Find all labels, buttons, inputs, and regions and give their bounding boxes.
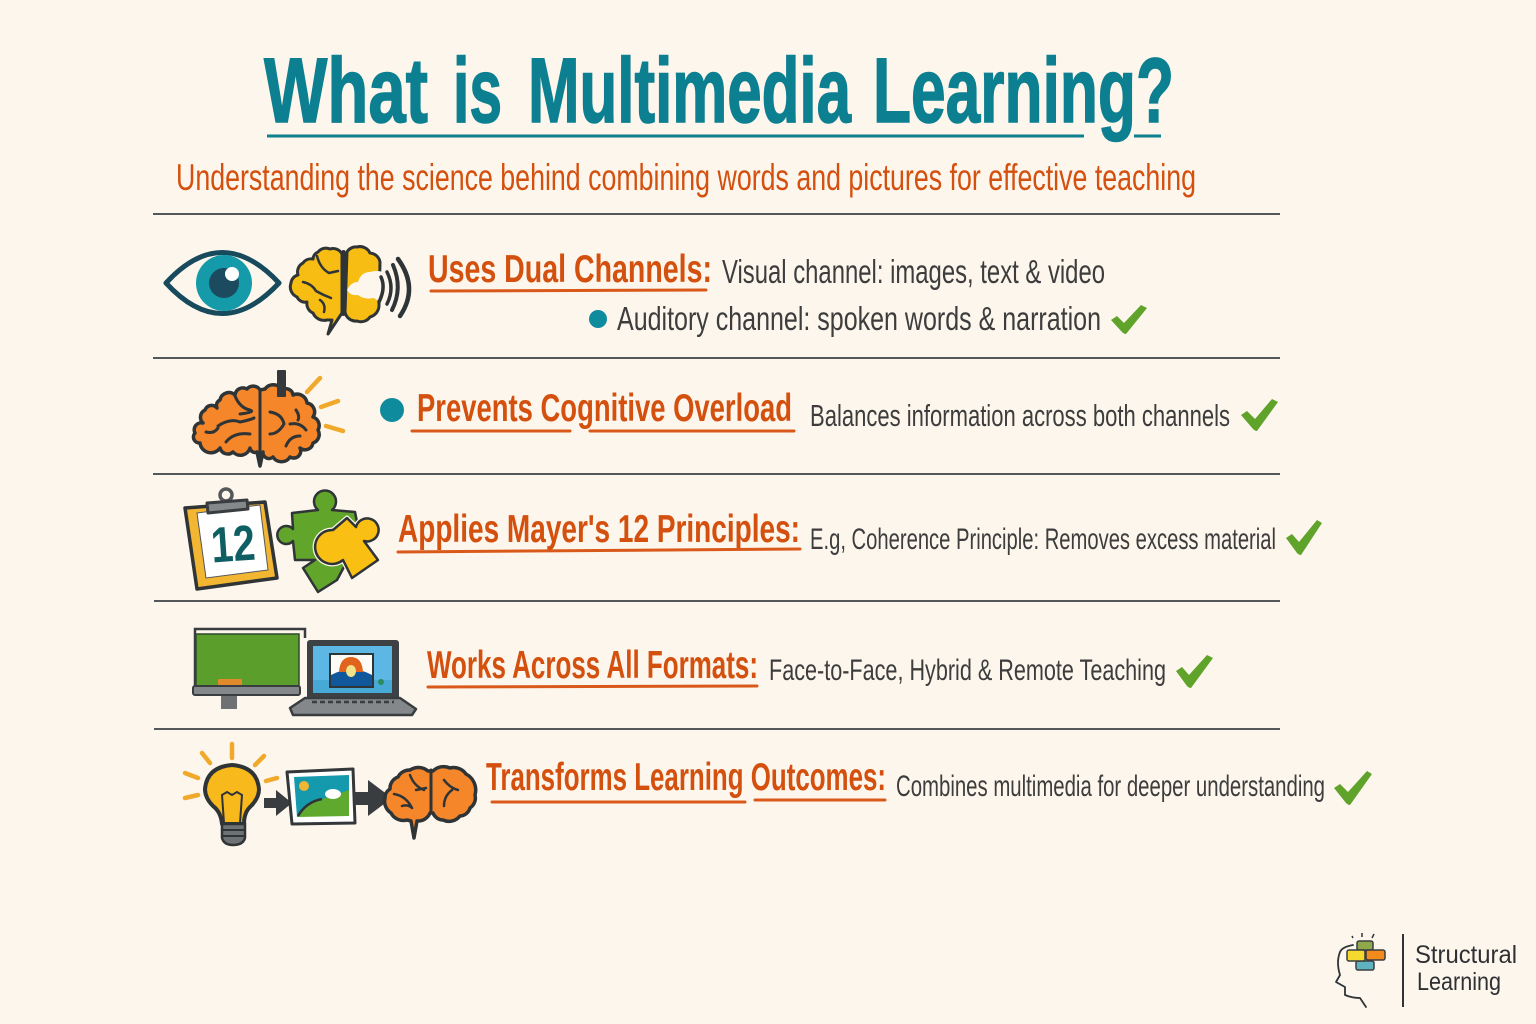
icon: puzzle pieces: [277, 491, 379, 592]
icon: chalkboard: [193, 629, 305, 709]
heading: works across all formats: Works Across All Formats:: [427, 644, 758, 687]
icon: yellow brain with sound waves: [290, 247, 409, 334]
text: coherence principle: E.g, Coherence Principle: Removes excess material: [810, 523, 1276, 556]
logo: structural learning: [1336, 933, 1517, 1007]
arrow: picture to brain: [354, 780, 392, 816]
heading: applies mayer's 12 principles: Applies Mayer's 12 Principles:: [398, 508, 800, 551]
icon: clipboard with 12: [185, 489, 277, 589]
icon: light bulb: [185, 744, 277, 845]
text: visual channel: Visual channel: images, text & video: [722, 253, 1105, 290]
bullet dot: [380, 398, 404, 422]
row: prevents cognitive overload: [193, 370, 1278, 466]
text: auditory channel: Auditory channel: spoken words & narration: [617, 300, 1101, 337]
text: combines multimedia: Combines multimedia for deeper understanding: [896, 770, 1325, 803]
text: logo name: [1415, 941, 1517, 996]
text: logo name: Learning: [1417, 968, 1501, 996]
heading: uses dual channels: Uses Dual Channels:: [428, 248, 712, 291]
row: transforms learning outcomes: [185, 744, 1372, 845]
icon: head with blocks: [1336, 933, 1385, 1007]
icon: check mark: [1286, 520, 1322, 555]
heading: transforms learning outcomes: Transforms Learning Outcomes:: [486, 756, 886, 799]
icon: laptop: [290, 640, 416, 715]
icon: check mark: [1334, 771, 1372, 805]
arrow: bulb to picture: [264, 790, 292, 816]
icon: picture frame: [287, 769, 355, 824]
title: Learning?: [873, 40, 1174, 142]
title: [264, 40, 1174, 142]
row: works across all formats: [193, 629, 1213, 715]
icon: check mark: [1176, 655, 1213, 688]
icon: clipboard with 12: 12: [209, 515, 257, 573]
title: Multimedia: [528, 40, 852, 142]
row: uses dual channels: [166, 247, 1147, 337]
icon: orange brain with alert: [193, 370, 343, 466]
heading: prevents cognitive overload: Prevents Cognitive Overload: [417, 387, 792, 430]
bullet dot: [589, 310, 607, 328]
text: delivery formats: Face-to-Face, Hybrid & Remote Teaching: [769, 654, 1166, 687]
icon: orange brain: [385, 767, 476, 838]
title: is: [453, 40, 502, 142]
text: logo name: Structural: [1415, 941, 1517, 969]
icon: check mark: [1111, 305, 1147, 334]
icon: eye: [166, 252, 279, 314]
icon: check mark: [1241, 399, 1278, 431]
title: What: [264, 40, 428, 142]
row: applies mayer's principles: [185, 489, 1322, 592]
text: balances information: Balances information across both channels: [810, 398, 1230, 433]
